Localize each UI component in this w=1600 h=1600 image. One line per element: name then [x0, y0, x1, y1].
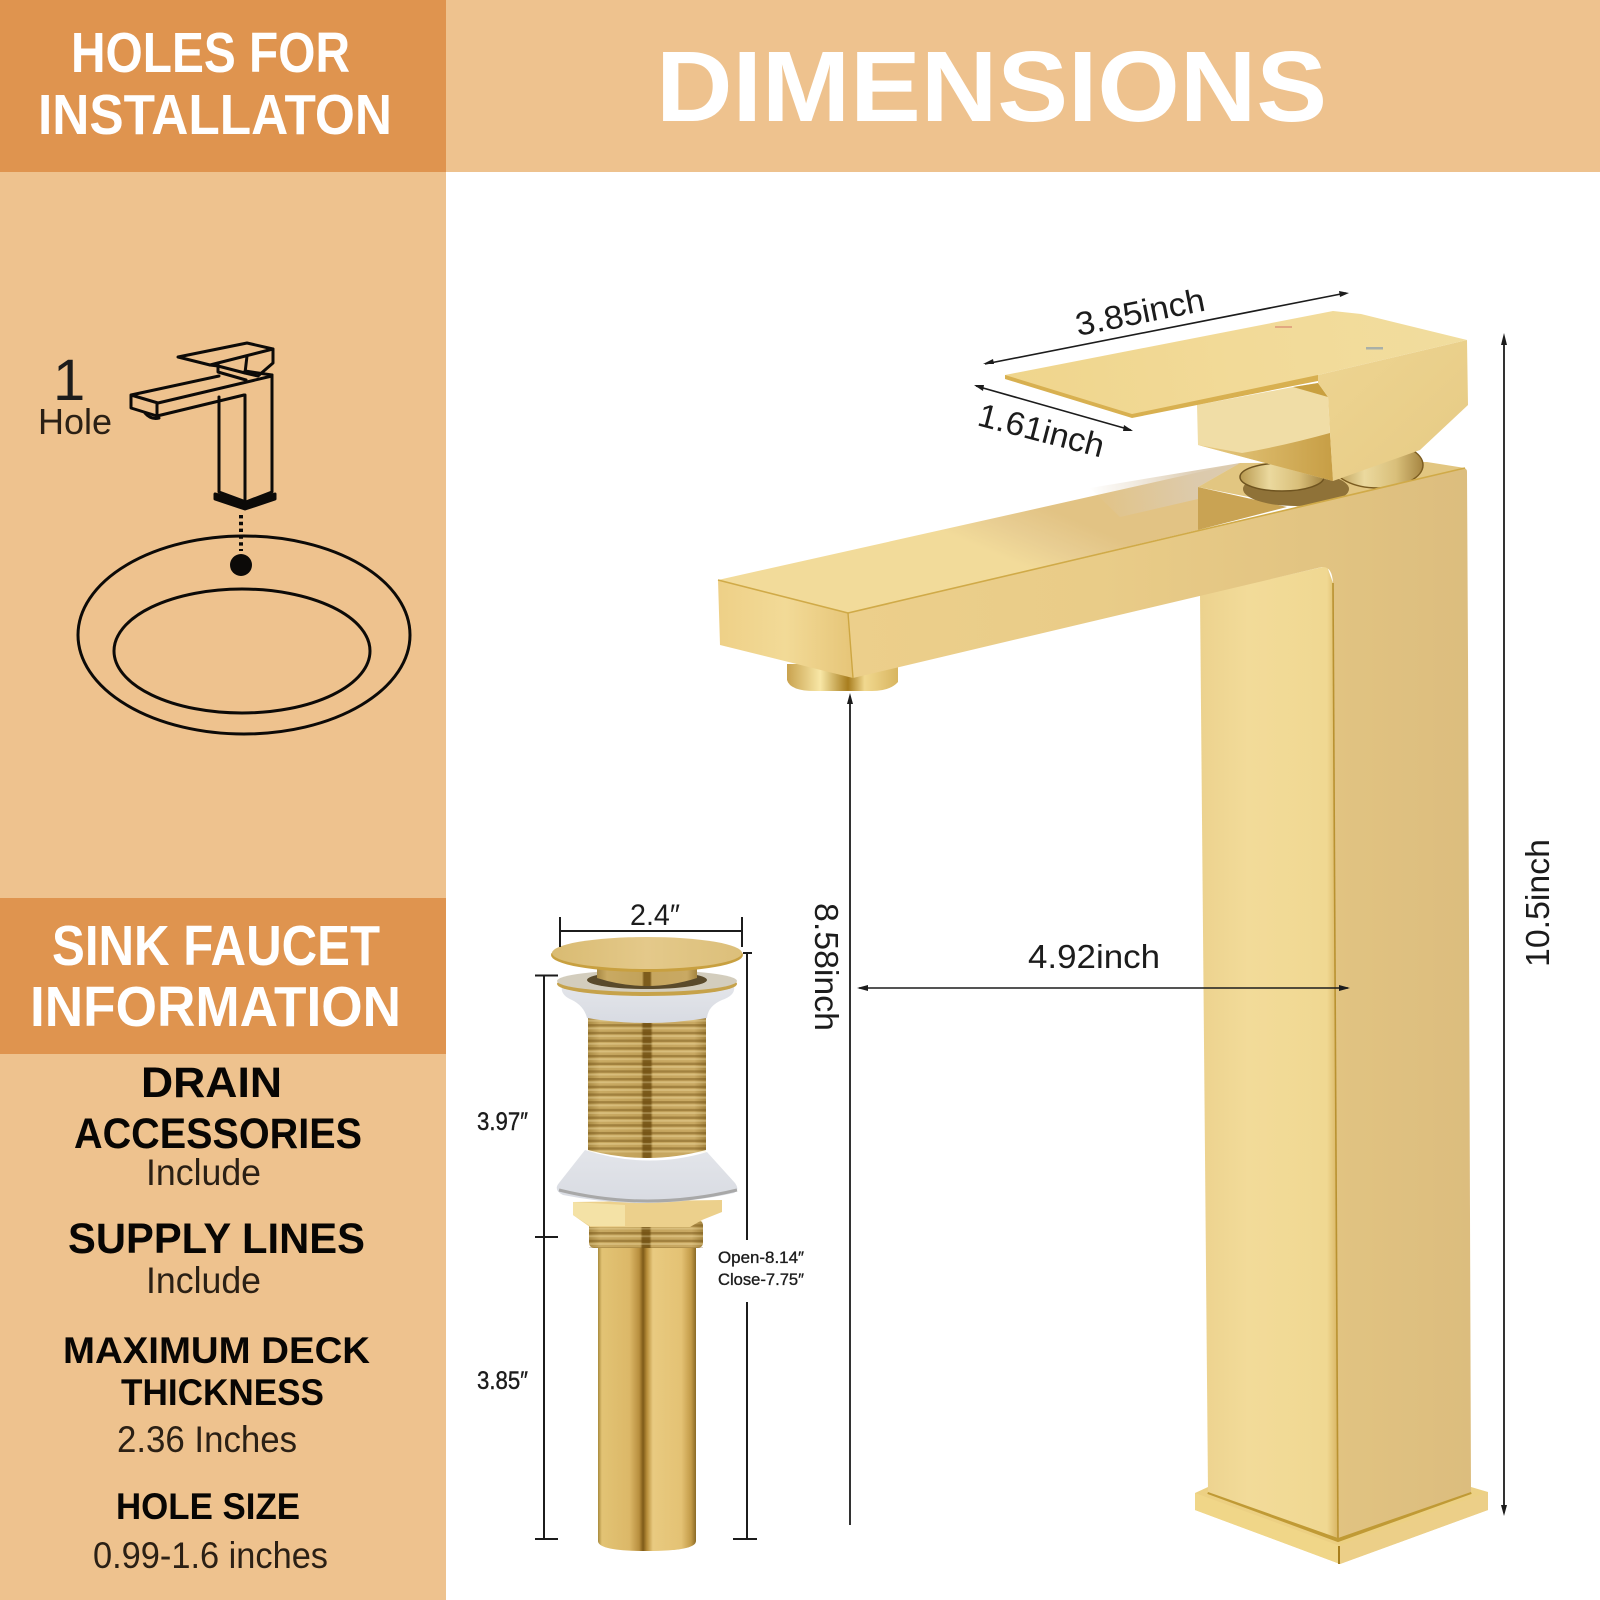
- flange rim: [557, 970, 737, 996]
- dimension: total height 10.5inch: 10.5inch: [1519, 839, 1556, 967]
- dimension: spout reach 4.92inch: [857, 938, 1350, 991]
- dimension: spout reach 4.92inch: 4.92inch: [1028, 938, 1160, 975]
- dimension: handle length 3.85inch: [983, 281, 1349, 364]
- label: open and close: [718, 1248, 804, 1289]
- spec: hole size: [93, 1486, 328, 1576]
- spec: maximum deck thickness: THICKNESS: [121, 1372, 324, 1413]
- icon: dotted connector: [239, 515, 243, 551]
- dimension: drain width 2.4: 2.4″: [630, 899, 680, 932]
- faucet product illustration: [718, 311, 1488, 1564]
- spout tip: [718, 580, 853, 678]
- spec: supply lines: SUPPLY LINES: [68, 1215, 365, 1263]
- label: 1 hole: Hole: [38, 401, 112, 442]
- label: 1 hole: 1: [53, 348, 85, 413]
- spec: hole size: HOLE SIZE: [116, 1486, 300, 1527]
- aerator: [787, 664, 898, 691]
- dimension: drain left height: [477, 976, 558, 1539]
- panel: sink faucet information band: [0, 898, 446, 1054]
- panel: holes for installation header: [0, 0, 446, 172]
- dimension: total height 10.5inch: [1501, 333, 1556, 1516]
- spec: drain accessories: DRAIN: [141, 1059, 282, 1107]
- spec: maximum deck thickness: [63, 1330, 370, 1460]
- spec: supply lines: Include: [146, 1260, 261, 1301]
- spout front and column right face: [848, 468, 1471, 1538]
- column left face: [1200, 566, 1338, 1538]
- heading: installaton: INSTALLATON: [38, 83, 392, 147]
- spout recess: [1198, 487, 1287, 530]
- base plate: [1195, 1487, 1488, 1564]
- spec: drain accessories: ACCESSORIES: [74, 1110, 362, 1158]
- icon: faucet outline: [131, 343, 275, 509]
- label: 3.97: 3.97″: [477, 1108, 528, 1136]
- spec: drain accessories: Include: [146, 1152, 261, 1193]
- title: DIMENSIONS: DIMENSIONS: [656, 31, 1327, 143]
- dimension: handle length 3.85inch: 3.85inch: [1072, 281, 1208, 343]
- label: 1 hole: [38, 348, 112, 442]
- heading: information: INFORMATION: [30, 975, 401, 1039]
- label: 3.85: 3.85″: [477, 1367, 528, 1395]
- lower threads: [589, 1220, 703, 1248]
- panel: dimensions title band: [446, 0, 1600, 172]
- lower white collar: [557, 1150, 737, 1203]
- panel: left column background: [0, 0, 446, 1600]
- drain assembly illustration: [551, 937, 743, 1551]
- spec: maximum deck thickness: MAXIMUM DECK: [63, 1330, 370, 1371]
- label: open and close: Close-7.75″: [718, 1270, 804, 1289]
- spout back and top: [1198, 462, 1465, 507]
- upper white cone: [562, 986, 734, 1023]
- threaded body: [588, 1012, 706, 1158]
- spec: maximum deck thickness: 2.36 Inches: [117, 1419, 297, 1460]
- dimension: spout height 8.58inch: 8.58inch: [808, 903, 845, 1031]
- heading: sink faucet: SINK FAUCET: [52, 914, 380, 978]
- spec: drain accessories: [74, 1059, 362, 1193]
- pop-up stem: [597, 964, 697, 986]
- dimension: drain width 2.4: [560, 899, 742, 947]
- swivel rings: [1240, 442, 1423, 506]
- dimension: handle width 1.61inch: [974, 385, 1133, 464]
- pop-up cap: [551, 937, 743, 972]
- lever handle: [1005, 311, 1468, 481]
- dimension: drain right height: [718, 953, 804, 1539]
- spec: hole size: 0.99-1.6 inches: [93, 1535, 328, 1576]
- icon: sink with hole: [78, 536, 410, 734]
- spec: supply lines: [68, 1215, 365, 1301]
- dimension: spout height 8.58inch: [808, 693, 853, 1525]
- label: open and close: Open-8.14″: [718, 1248, 804, 1267]
- hex nut: [573, 1200, 722, 1227]
- dimension: handle width 1.61inch: 1.61inch: [974, 396, 1108, 464]
- tailpiece tube: [598, 1240, 696, 1551]
- heading: holes for: HOLES FOR: [71, 21, 350, 85]
